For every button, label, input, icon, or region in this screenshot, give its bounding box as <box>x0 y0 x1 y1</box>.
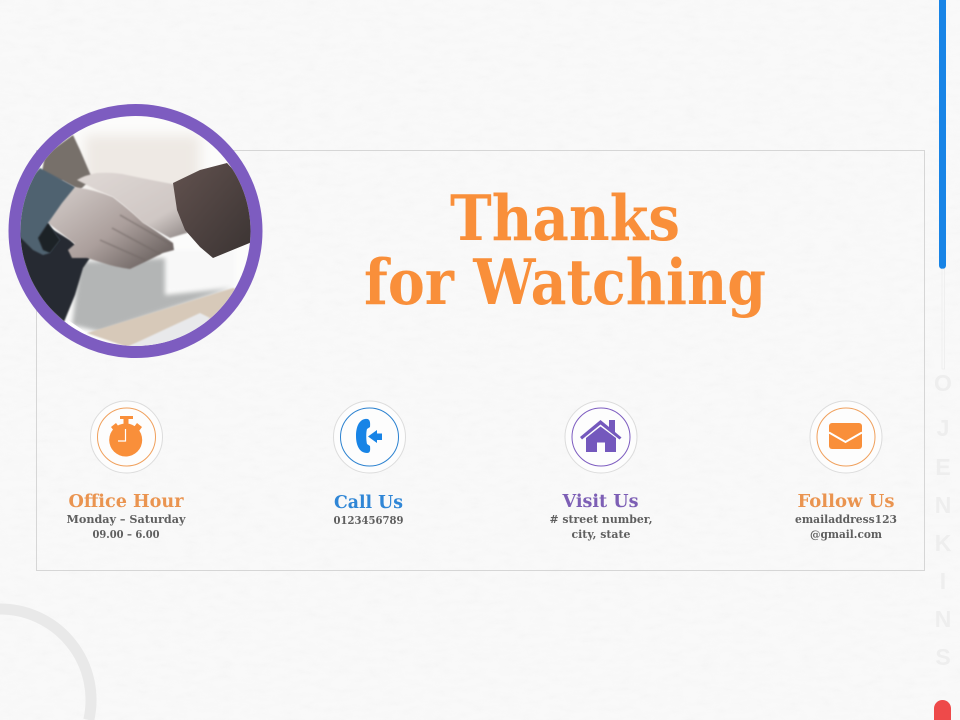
decorative ring: bottom left <box>0 609 91 720</box>
icon: house <box>565 401 637 473</box>
sidebar: vertical name: N <box>935 606 951 632</box>
sidebar: vertical name: E <box>935 454 951 480</box>
sidebar: vertical name: I <box>940 568 946 594</box>
details: office hours <box>66 513 186 541</box>
label: office hour: Office Hour <box>68 492 184 512</box>
details: address: # street number, <box>550 513 652 526</box>
upper body of left figure <box>42 135 92 190</box>
right hand <box>77 173 190 238</box>
details: email: @gmail.com <box>810 528 882 541</box>
left hand <box>48 180 174 269</box>
details: address: city, state <box>572 528 631 541</box>
details: email <box>795 513 897 541</box>
title: Thanks for Watching: Thanks <box>450 181 680 255</box>
contact: follow us <box>795 401 897 541</box>
contact: office hour <box>66 401 186 541</box>
icon: phone <box>334 401 406 473</box>
details: address <box>550 513 652 541</box>
photo: handshake in purple ring <box>15 110 256 352</box>
details: office hours: 09.00 – 6.00 <box>92 528 160 541</box>
details: phone number: 0123456789 <box>334 514 404 527</box>
details: office hours: Monday – Saturday <box>66 513 186 526</box>
sidebar: vertical name: S <box>935 644 951 670</box>
blue cuff <box>18 168 75 255</box>
details: email: emailaddress123 <box>795 513 897 526</box>
sidebar: red marker <box>934 700 951 720</box>
contact: call us <box>334 401 406 527</box>
sidebar: vertical name: K <box>935 530 952 556</box>
label: visit us: Visit Us <box>561 492 639 512</box>
dark sleeve <box>173 163 252 258</box>
title: Thanks for Watching: for Watching <box>364 245 766 319</box>
title: Thanks for Watching <box>364 181 766 319</box>
icon: stopwatch <box>90 401 162 473</box>
sidebar: progress bar <box>939 0 946 369</box>
label: call us: Call Us <box>334 493 403 513</box>
label: follow us: Follow Us <box>798 492 895 512</box>
icon: envelope <box>810 401 882 473</box>
sidebar: vertical name: J <box>937 415 949 441</box>
sidebar: vertical name: O <box>934 370 952 396</box>
sidebar: vertical name <box>934 370 952 670</box>
contact: visit us <box>550 401 652 541</box>
content frame panel <box>36 150 924 570</box>
dark trousers <box>20 228 90 322</box>
sidebar: vertical name: N <box>935 492 951 518</box>
